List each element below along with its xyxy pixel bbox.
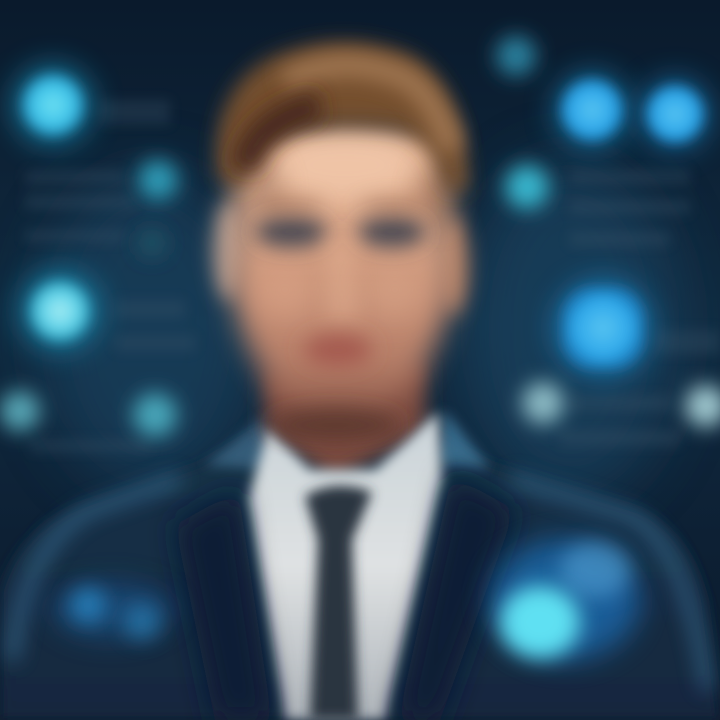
chin shadow bbox=[270, 409, 400, 441]
eyes bbox=[255, 217, 426, 247]
lapels bbox=[175, 475, 515, 720]
glowing nodes left bbox=[0, 63, 178, 437]
chest glow bbox=[490, 540, 640, 660]
glowing nodes right bbox=[496, 36, 720, 427]
tie bbox=[305, 486, 372, 720]
faint data text lines bbox=[25, 100, 720, 452]
neck bbox=[265, 360, 425, 480]
cheeks bbox=[257, 260, 313, 320]
temples bbox=[244, 160, 280, 220]
mouth bbox=[304, 334, 372, 366]
hair bbox=[217, 42, 468, 190]
lapel pocket glow bbox=[52, 582, 172, 640]
brows bbox=[257, 198, 426, 212]
nose bbox=[325, 240, 360, 320]
forehead highlight bbox=[270, 127, 420, 203]
white shirt bbox=[248, 412, 442, 720]
face bbox=[213, 127, 468, 441]
suit jacket bbox=[0, 410, 720, 720]
